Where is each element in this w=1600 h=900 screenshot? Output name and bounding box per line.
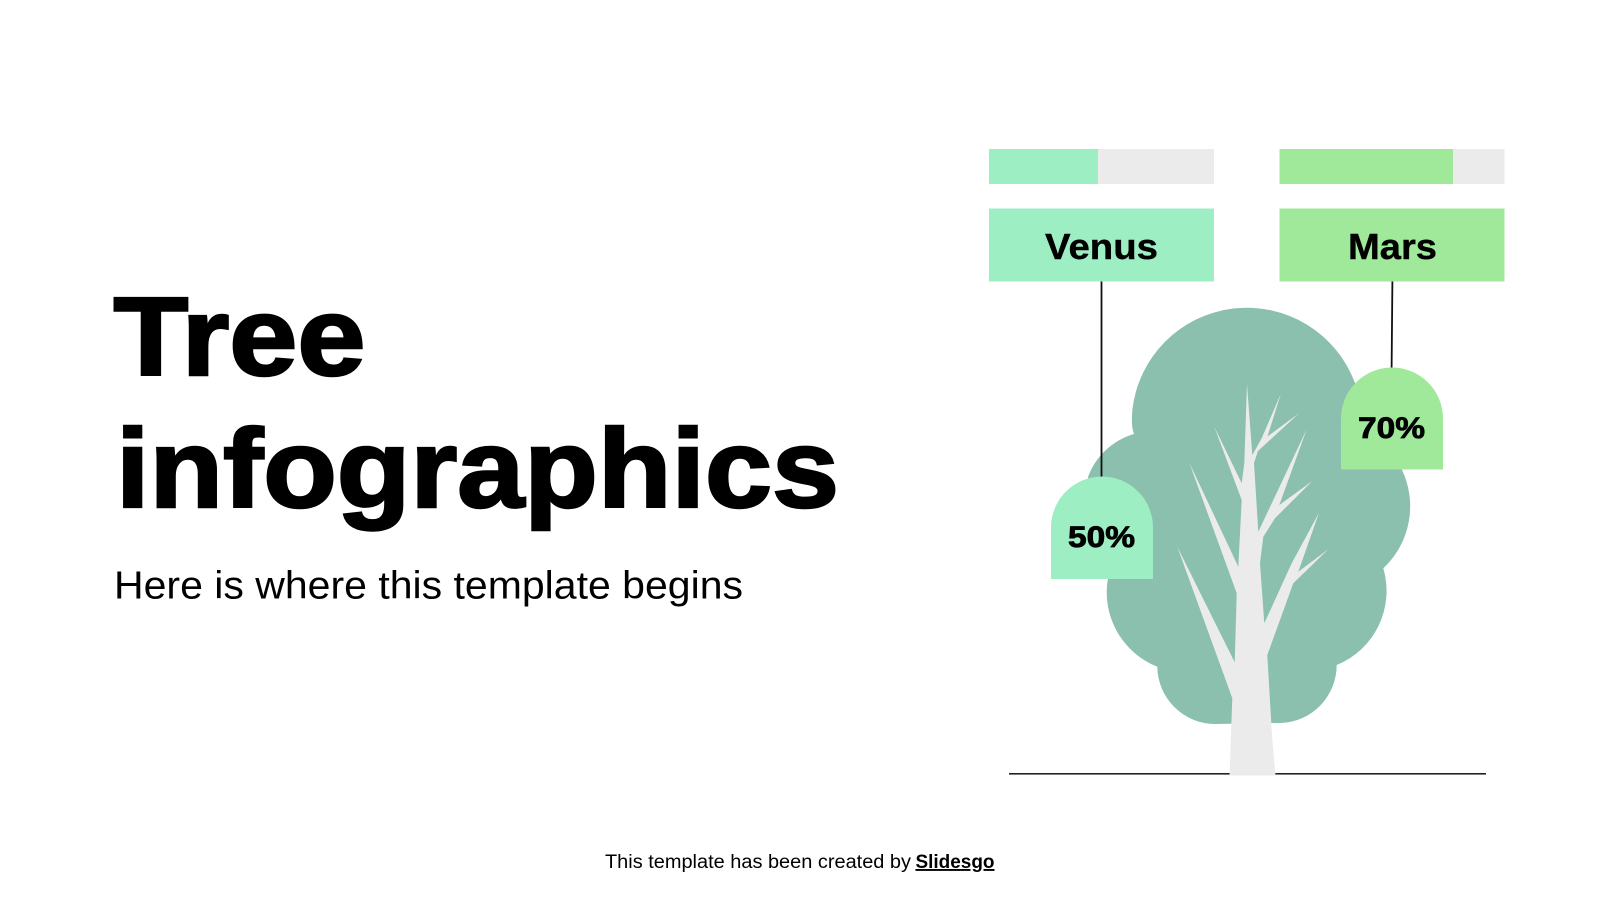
label: Venus	[989, 208, 1214, 282]
credit line: This template has been created by	[605, 852, 912, 873]
progress bar: Venus	[989, 149, 1214, 184]
title: Tree	[114, 275, 366, 399]
credit line: Slidesgo	[916, 852, 994, 873]
badge: 50%: 50%	[1068, 521, 1135, 554]
connector: Venus	[1101, 281, 1102, 478]
tree trunk and branches	[1177, 384, 1328, 776]
badge: 70%	[1341, 368, 1443, 470]
tree	[1088, 308, 1410, 776]
connector: Mars	[1391, 281, 1393, 369]
title: infographics	[116, 407, 839, 531]
badge: 50%	[1051, 477, 1153, 579]
badge: 70%: 70%	[1358, 412, 1425, 445]
title	[114, 275, 839, 531]
label: Mars: Mars	[1348, 226, 1437, 267]
subtitle: Here is where this template begins	[114, 564, 743, 608]
label: Mars	[1280, 208, 1504, 282]
tree crown	[1088, 308, 1410, 724]
label: Venus: Venus	[1045, 226, 1158, 267]
progress bar: Mars	[1280, 149, 1504, 184]
ground line	[1009, 773, 1486, 775]
